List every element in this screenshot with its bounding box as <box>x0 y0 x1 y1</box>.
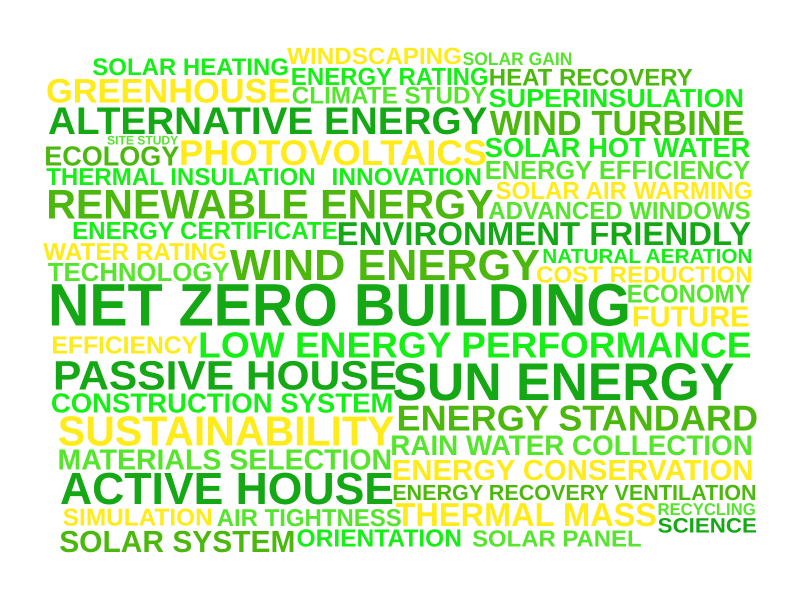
word: ecology: ECOLOGY <box>44 140 179 172</box>
word: future: FUTURE <box>632 302 750 334</box>
word: low energy performance: LOW ENERGY PERFORMANCE <box>198 324 751 365</box>
word: solar heating: SOLAR HEATING <box>92 54 289 81</box>
word: active house: ACTIVE HOUSE <box>60 463 394 514</box>
word: solar gain: SOLAR GAIN <box>463 49 572 69</box>
word: technology: TECHNOLOGY <box>48 257 230 287</box>
word: windscaping: WINDSCAPING <box>287 43 462 69</box>
word: orientation: ORIENTATION <box>296 526 462 553</box>
word: science: SCIENCE <box>658 515 757 538</box>
word: rain water collection: RAIN WATER COLLECTION <box>390 429 753 461</box>
word: solar panel: SOLAR PANEL <box>472 526 642 552</box>
word: innovation: INNOVATION <box>332 164 482 191</box>
word: energy efficiency: ENERGY EFFICIENCY <box>485 155 751 185</box>
word: thermal mass: THERMAL MASS <box>396 496 657 533</box>
word: construction system: CONSTRUCTION SYSTEM <box>51 388 393 419</box>
word: solar air warming: SOLAR AIR WARMING <box>496 178 753 205</box>
word: cost reduction: COST REDUCTION <box>536 262 753 288</box>
word: energy recovery ventilation: ENERGY RECOVERY VENTILATION <box>392 480 757 505</box>
word: energy certificate: ENERGY CERTIFICATE <box>72 218 338 245</box>
word: natural aeration: NATURAL AERATION <box>542 246 752 268</box>
word: alternative energy: ALTERNATIVE ENERGY <box>48 100 488 143</box>
word: simulation: SIMULATION <box>63 505 213 532</box>
word: sun energy: SUN ENERGY <box>392 353 734 412</box>
word: heat recovery: HEAT RECOVERY <box>489 64 693 92</box>
word: renewable energy: RENEWABLE ENERGY <box>46 180 494 227</box>
word: recycling: RECYCLING <box>658 500 756 519</box>
word: energy conservation: ENERGY CONSERVATION <box>392 455 754 487</box>
word: efficiency: EFFICIENCY <box>52 332 199 359</box>
word: energy standard: ENERGY STANDARD <box>396 398 758 439</box>
word: energy rating: ENERGY RATING <box>291 64 489 91</box>
word: superinsulation: SUPERINSULATION <box>489 83 744 113</box>
word: water rating: WATER RATING <box>43 239 227 266</box>
word: solar system: SOLAR SYSTEM <box>59 525 296 559</box>
word: advanced windows: ADVANCED WINDOWS <box>488 198 751 225</box>
word: climate study: CLIMATE STUDY <box>292 82 487 110</box>
word: sustainability: SUSTAINABILITY <box>58 408 394 455</box>
word: air tightness: AIR TIGHTNESS <box>217 505 402 532</box>
word: net zero building: NET ZERO BUILDING <box>48 272 631 339</box>
word: wind turbine: WIND TURBINE <box>490 104 745 143</box>
word: economy: ECONOMY <box>627 281 750 309</box>
word: passive house: PASSIVE HOUSE <box>53 352 397 398</box>
word: site study: SITE STUDY <box>107 133 179 147</box>
word: photovoltaics: PHOTOVOLTAICS <box>179 133 487 173</box>
word: materials selection: MATERIALS SELECTION <box>58 444 392 476</box>
word: wind energy: WIND ENERGY <box>230 242 540 290</box>
word: environment friendly: ENVIRONMENT FRIENDLY <box>337 215 751 252</box>
word: thermal insulation: THERMAL INSULATION <box>46 164 316 191</box>
word: solar hot water: SOLAR HOT WATER <box>485 132 750 163</box>
word: greenhouse: GREENHOUSE <box>46 72 290 110</box>
